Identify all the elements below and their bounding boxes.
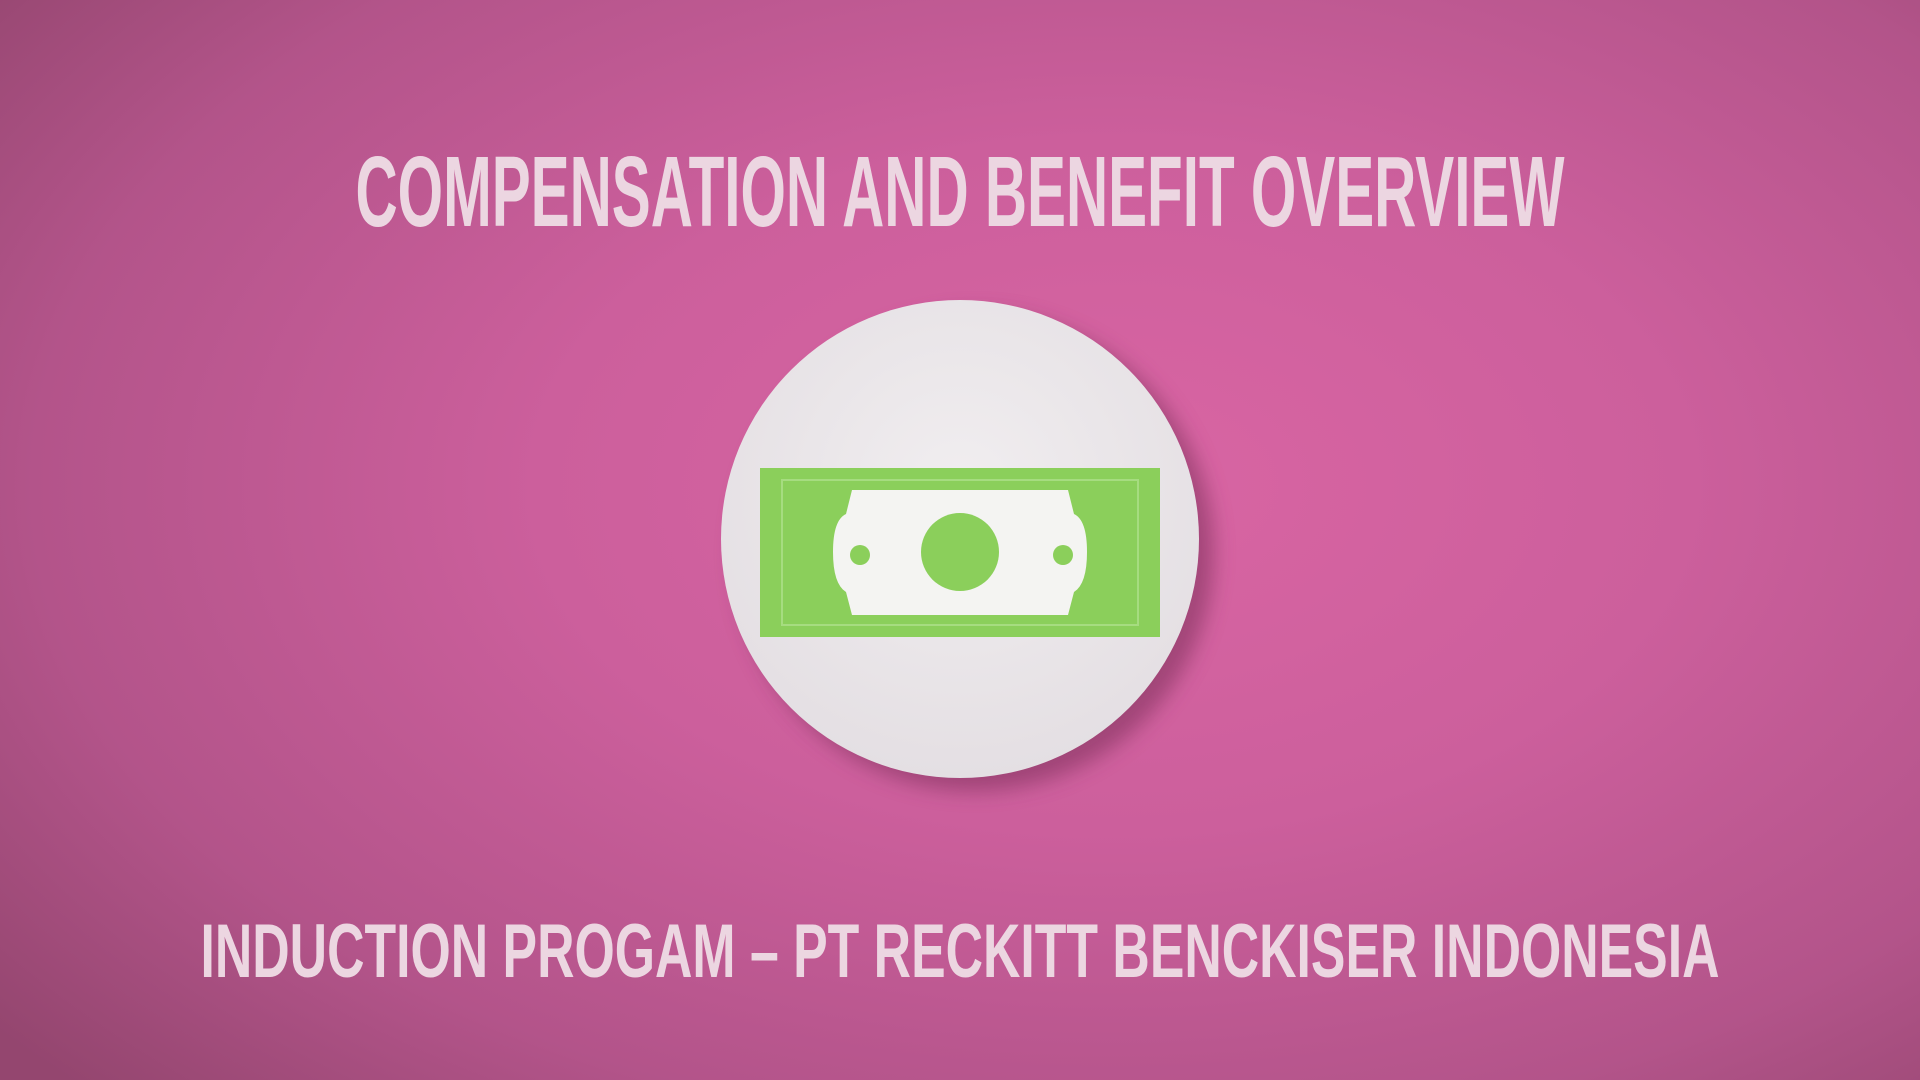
icon: money circle [721,300,1214,791]
icon: banknote [760,468,1160,637]
